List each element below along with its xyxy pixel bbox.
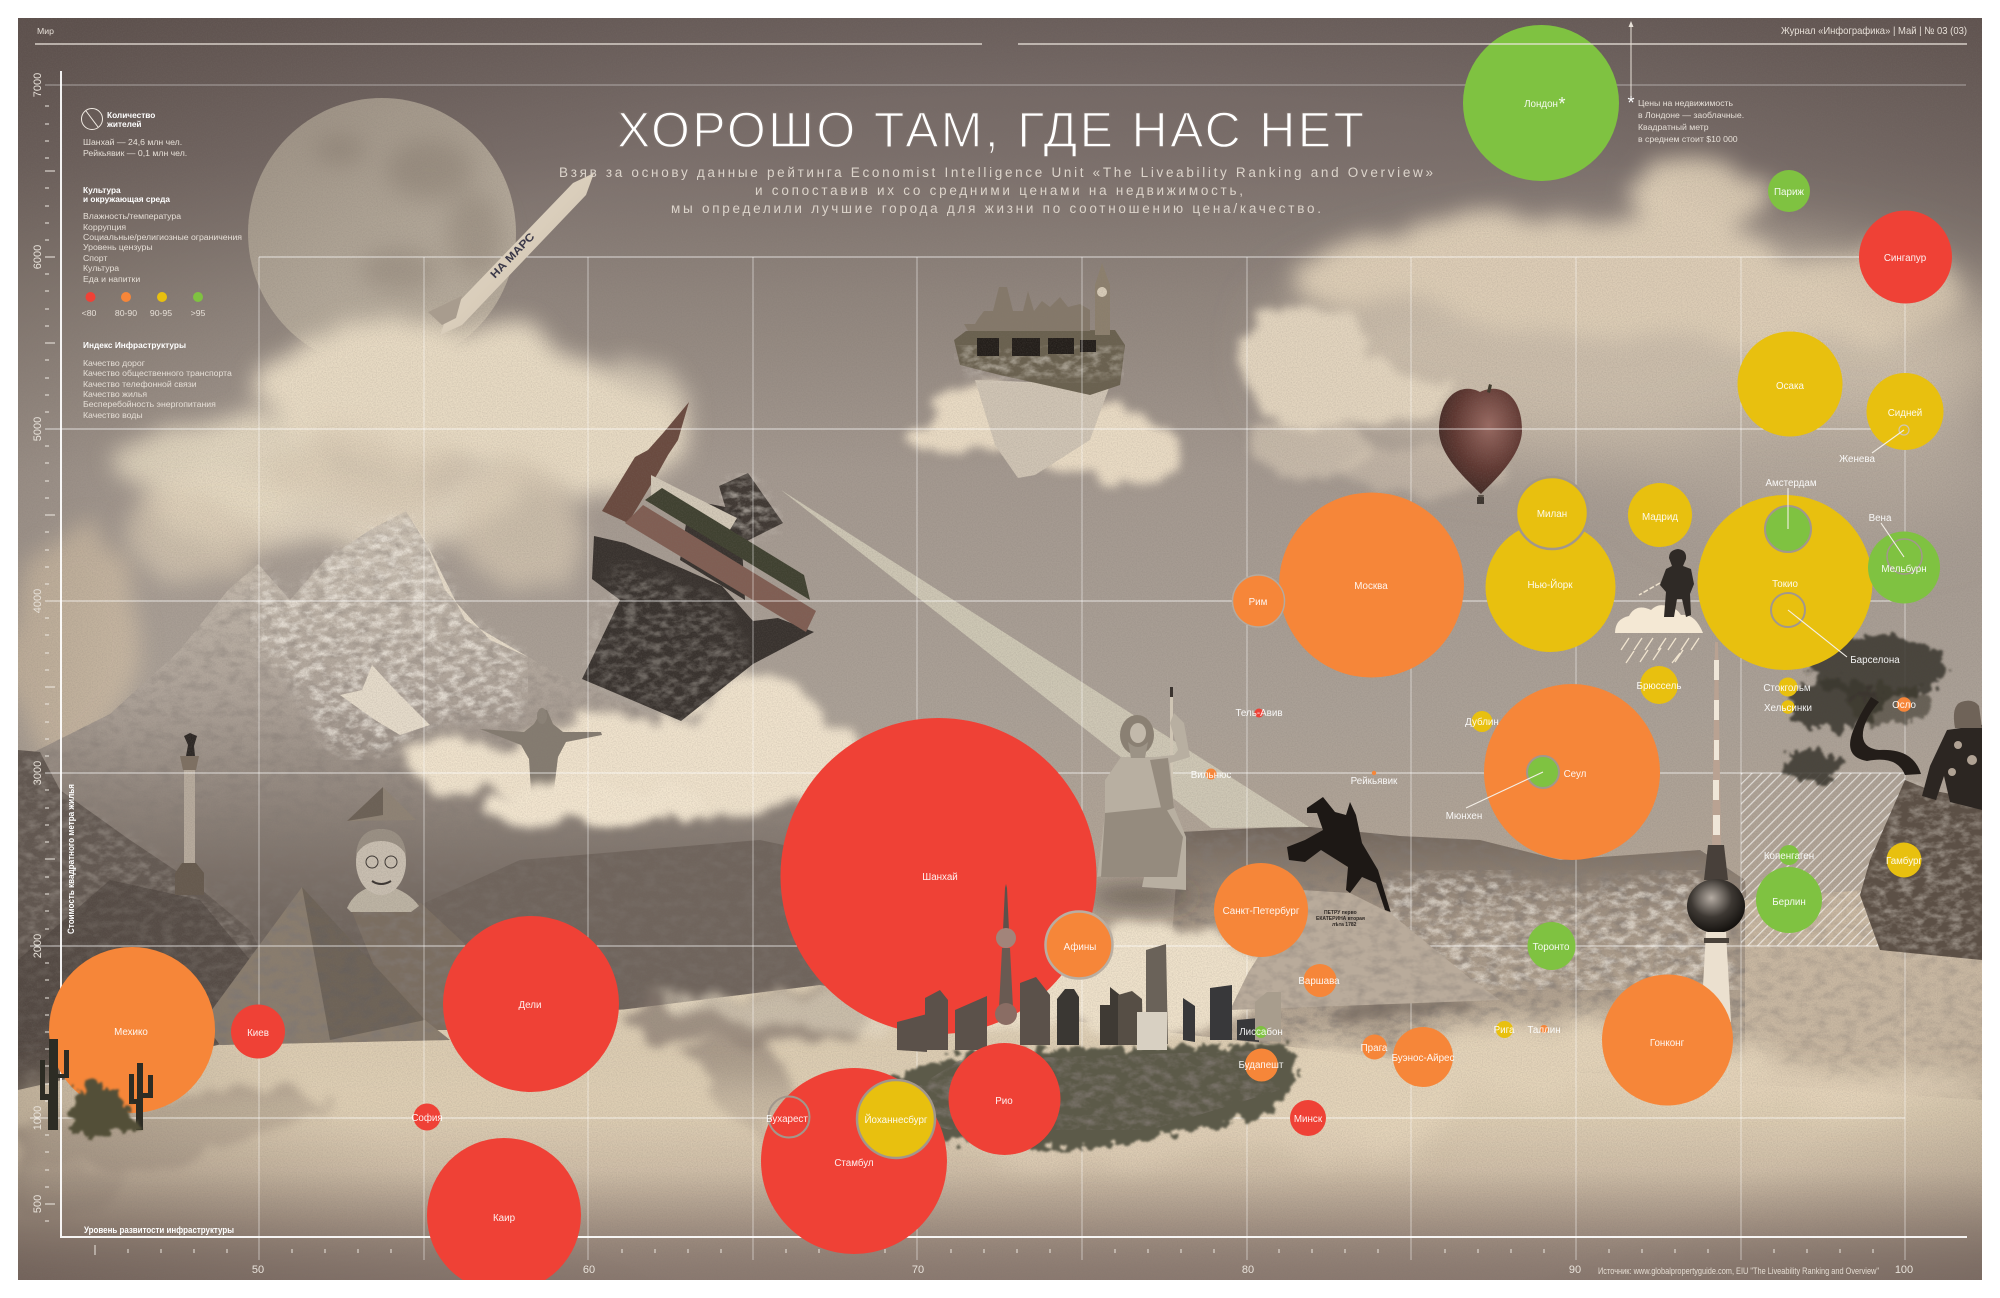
bubble labels: all cities: Вильнюс bbox=[1191, 770, 1231, 781]
bubble labels: all cities: Рио bbox=[995, 1096, 1013, 1107]
illustration: canyon bbox=[1172, 826, 1746, 1054]
bubble labels: all cities: Стамбул bbox=[834, 1158, 874, 1169]
bubble labels: all cities: Варшава bbox=[1298, 976, 1340, 987]
bubble labels: all cities: Рим bbox=[1249, 597, 1268, 608]
legend: culture and environment: Еда и напитки bbox=[83, 274, 140, 284]
bubble labels: all cities: Осло bbox=[1892, 700, 1916, 711]
legend: population: Шанхай — 24,6 млн чел. bbox=[83, 137, 182, 147]
bubble labels: all cities: Дублин bbox=[1465, 717, 1499, 728]
illustration: mermaid statue on rock bbox=[1860, 701, 1982, 960]
y axis labels: 500 bbox=[32, 1195, 44, 1213]
y axis labels: 5000 bbox=[32, 417, 44, 441]
legend: culture and environment: Культура bbox=[83, 263, 119, 273]
subtitle bbox=[559, 165, 1433, 216]
bubble labels: all cities: Таллин bbox=[1527, 1025, 1561, 1036]
header labels and rules: Журнал «Инфографика» | Май | № 03 (03) bbox=[1781, 25, 1967, 37]
legend: colour key bbox=[82, 292, 206, 318]
illustration: great pyramids bbox=[203, 887, 520, 1045]
bubble labels: all cities: * bbox=[1558, 94, 1566, 114]
bubble outlines: nested cities (Бухарест, Вена, Барселона, Женева) bbox=[768, 425, 1922, 1138]
title: ХОРОШО ТАМ, ГДЕ НАС НЕТ bbox=[617, 102, 1364, 158]
bubble labels: all cities: Гамбург bbox=[1886, 856, 1922, 867]
bubble labels: all cities: Рейкьявик bbox=[1351, 776, 1398, 787]
bubble labels: all cities: Лиссабон bbox=[1239, 1027, 1283, 1038]
bubble labels: all cities: Сингапур bbox=[1884, 253, 1927, 264]
bubble labels: all cities: Тель-Авив bbox=[1235, 708, 1283, 719]
London footnote with arrow: в среднем стоит $10 000 bbox=[1638, 134, 1738, 144]
bubble labels: all cities: Сеул bbox=[1564, 769, 1587, 780]
illustration: bonsai tree bbox=[1784, 636, 1946, 781]
text: rock inscription: ПЕТРУ перво bbox=[1324, 910, 1357, 916]
illustration: floating pyramid capstone bbox=[347, 787, 416, 821]
source note: Источник: www.globalpropertyguide.com, EIU "The Liveability Ranking and Overview" bbox=[1598, 1266, 1879, 1276]
bubble labels: all cities: Каир bbox=[493, 1213, 516, 1224]
illustration: Manneken Pis on cloud with rain bbox=[1615, 549, 1703, 663]
legend: culture and environment: Социальные/религиозные ограничения bbox=[83, 232, 242, 242]
x axis labels: 70 bbox=[912, 1264, 924, 1276]
legend: infrastructure index bbox=[83, 340, 232, 420]
text: rock inscription bbox=[1316, 910, 1365, 928]
cloud in front of Christ statue bbox=[480, 783, 700, 827]
legend: colour key: 90-95 bbox=[150, 308, 172, 318]
x axis title: Уровень развитости инфраструктуры bbox=[84, 1225, 234, 1235]
bubble labels: all cities: Буэнос-Айрес bbox=[1392, 1053, 1455, 1064]
y axis labels: 6000 bbox=[32, 245, 44, 269]
y axis labels: 1000 bbox=[32, 1106, 44, 1130]
callout leader lines bbox=[1466, 430, 1904, 808]
legend: population: жителей bbox=[106, 119, 142, 129]
x axis labels bbox=[252, 1264, 1913, 1276]
bubble labels: all cities: Стокгольм bbox=[1763, 683, 1811, 694]
illustration: water and dark sand streaks bbox=[18, 985, 1470, 1220]
illustration: Christ the Redeemer bbox=[480, 708, 602, 807]
bubble labels: all cities: Амстердам bbox=[1765, 478, 1817, 489]
illustration: dark central ridge bbox=[420, 840, 1040, 1010]
bubble labels: all cities: Мельбурн bbox=[1881, 564, 1927, 575]
illustration: cactus group bbox=[40, 1039, 153, 1138]
y axis labels: 3000 bbox=[32, 761, 44, 785]
subtitle: Взяв за основу данные рейтинга Economist Intelligence Unit «The Liveability Ranking and Overview» bbox=[559, 165, 1433, 180]
bubble labels: all cities: Москва bbox=[1354, 581, 1388, 592]
London footnote with arrow: Цены на недвижимость bbox=[1638, 98, 1734, 108]
subtitle: мы определили лучшие города для жизни по соотношению цена/качество. bbox=[671, 201, 1321, 216]
text: rock inscription: лѣта 1782 bbox=[1332, 922, 1357, 928]
illustration: Bronze Horseman on rock bbox=[1230, 797, 1500, 1010]
x axis labels: 80 bbox=[1242, 1264, 1254, 1276]
bubble labels: all cities: Шанхай bbox=[922, 872, 958, 883]
text: rock inscription: ЕКАТЕРИНА вторая bbox=[1316, 916, 1365, 922]
illustration: cloud around Christ statue bbox=[411, 675, 858, 822]
legend: population bbox=[82, 108, 187, 158]
London footnote with arrow bbox=[1627, 21, 1744, 144]
illustration: moon bbox=[248, 98, 516, 368]
soft lightening of right sky bbox=[1280, 240, 2000, 530]
cloud: large plume under the rocket bbox=[10, 310, 690, 755]
bubble labels: all cities: Брюссель bbox=[1637, 681, 1681, 692]
legend: infrastructure index: Качество воды bbox=[83, 410, 143, 420]
legend: infrastructure index: Бесперебойность энергопитания bbox=[83, 399, 216, 409]
bubble labels: all cities: Минск bbox=[1294, 1114, 1323, 1125]
illustration: left dark mountain bbox=[18, 750, 270, 1090]
illustration: ground and sand beach bbox=[18, 985, 1982, 1280]
hatched best-value area bbox=[1741, 773, 1905, 946]
London footnote with arrow: в Лондоне — заоблачные. bbox=[1638, 110, 1744, 120]
illustration: rocky cliff right bbox=[1745, 880, 1982, 1150]
cloud: upper right bbox=[1300, 158, 1970, 345]
bubbles: yellow cities bbox=[857, 332, 1944, 1158]
bubble labels: all cities: Прага bbox=[1361, 1043, 1388, 1054]
legend: infrastructure index: Индекс Инфраструктуры bbox=[83, 340, 186, 350]
bubble labels: all cities: Барселона bbox=[1850, 655, 1900, 666]
legend: culture and environment: Культура bbox=[83, 185, 121, 195]
x axis labels: 50 bbox=[252, 1264, 264, 1276]
illustration: Berlin TV tower bbox=[1687, 642, 1745, 1022]
header labels and rules bbox=[35, 25, 1967, 44]
fog on the mountain summit bbox=[115, 436, 580, 585]
illustration: Gandhi portrait bbox=[347, 829, 419, 912]
bubble labels: all cities: Йоханнесбург bbox=[864, 1114, 928, 1126]
bubble labels: all cities: Будапешт bbox=[1238, 1060, 1284, 1071]
legend: culture and environment: Влажность/температура bbox=[83, 211, 181, 221]
bubble labels: all cities: Вена bbox=[1869, 513, 1892, 524]
bubble labels: all cities: Берлин bbox=[1772, 897, 1806, 908]
legend: colour key: <80 bbox=[82, 308, 97, 318]
bubble labels: all cities: Нью-Йорк bbox=[1527, 579, 1573, 591]
illustration: trees under skyline bbox=[855, 1044, 1300, 1150]
illustration: rocket to Mars bbox=[428, 173, 594, 335]
legend: infrastructure index: Качество общественного транспорта bbox=[83, 368, 232, 378]
bubble labels: all cities: Хельсинки bbox=[1764, 703, 1812, 714]
bubble labels: all cities: Бухарест bbox=[766, 1114, 808, 1125]
legend: infrastructure index: Качество дорог bbox=[83, 358, 145, 368]
legend: colour key: 80-90 bbox=[115, 308, 137, 318]
cream haze behind skyline bbox=[970, 930, 1280, 1030]
legend: culture and environment: Коррупция bbox=[83, 222, 126, 232]
cloud: under floating island bbox=[910, 388, 1182, 481]
bubble labels: all cities: Осака bbox=[1776, 381, 1805, 392]
cloud: centre right behind apple balloon bbox=[1243, 300, 1505, 492]
bubble labels: all cities: Женева bbox=[1839, 454, 1875, 465]
y axis title: Стоимость квадратного метра жилья bbox=[66, 784, 76, 934]
bubble labels: all cities: Париж bbox=[1774, 187, 1804, 198]
bubbles: red cities bbox=[231, 210, 1952, 1292]
bubble labels: all cities bbox=[114, 94, 1927, 1224]
bubble labels: all cities: Токио bbox=[1772, 579, 1798, 590]
legend: population: Рейкьявик — 0,1 млн чел. bbox=[83, 148, 187, 158]
bubble labels: all cities: Рига bbox=[1494, 1025, 1515, 1036]
x axis labels: 90 bbox=[1569, 1264, 1581, 1276]
bubble labels: all cities: Санкт-Петербург bbox=[1223, 906, 1300, 917]
header labels and rules: Мир bbox=[37, 26, 54, 36]
bubble labels: all cities: Киев bbox=[247, 1028, 269, 1039]
bubble labels: all cities: Афины bbox=[1064, 942, 1096, 953]
y axis labels bbox=[32, 73, 44, 1213]
legend: culture and environment: Уровень цензуры bbox=[83, 242, 153, 252]
illustration: King Kong with Kremlin bbox=[582, 402, 816, 721]
illustration: Shanghai skyline bbox=[897, 884, 1281, 1052]
bubble labels: all cities: Лондон bbox=[1524, 99, 1558, 110]
background sky bbox=[18, 18, 1982, 1023]
y axis labels: 4000 bbox=[32, 589, 44, 613]
x axis labels: 60 bbox=[583, 1264, 595, 1276]
illustration: light beam bbox=[781, 490, 1309, 828]
subtitle: и сопоставив их со средними ценами на недвижимость, bbox=[755, 183, 1243, 198]
bubbles: green cities bbox=[1255, 25, 1940, 1038]
bubble labels: all cities: Копенгаген bbox=[1764, 851, 1814, 862]
illustration: floating Westminster island bbox=[954, 263, 1125, 478]
bubble labels: all cities: София bbox=[411, 1113, 443, 1124]
bubble labels: all cities: Гонконг bbox=[1650, 1038, 1685, 1049]
illustration: Zeus statue bbox=[1085, 687, 1195, 906]
legend: culture and environment bbox=[83, 185, 242, 284]
x axis labels: 100 bbox=[1895, 1264, 1913, 1276]
bubble labels: all cities: Мадрид bbox=[1642, 512, 1678, 523]
legend: culture and environment: и окружающая среда bbox=[83, 194, 170, 204]
y axis labels: 2000 bbox=[32, 934, 44, 958]
bubble labels: all cities: Сидней bbox=[1888, 408, 1922, 419]
bubbles: orange cities bbox=[49, 492, 1911, 1113]
London footnote with arrow: * bbox=[1627, 93, 1635, 113]
London footnote with arrow: Квадратный метр bbox=[1638, 122, 1709, 132]
bubble labels: all cities: Мюнхен bbox=[1446, 811, 1482, 822]
bubble labels: all cities: Дели bbox=[519, 1000, 541, 1011]
legend: population: Количество bbox=[107, 110, 155, 120]
bubble labels: all cities: Мехико bbox=[114, 1027, 148, 1038]
y axis labels: 7000 bbox=[32, 73, 44, 97]
clouds around the lower fog bbox=[940, 1022, 1990, 1160]
legend: culture and environment: Спорт bbox=[83, 253, 107, 263]
fog bottom darkening bbox=[18, 1170, 1982, 1280]
bubble labels: all cities: Милан bbox=[1537, 509, 1567, 520]
legend: colour key: >95 bbox=[191, 308, 206, 318]
legend: infrastructure index: Качество жилья bbox=[83, 389, 147, 399]
illustration: independence column monument bbox=[175, 733, 204, 895]
illustration: snowy mountain bbox=[36, 512, 801, 964]
bubble: Шанхай bbox=[780, 718, 1096, 1034]
legend: infrastructure index: Качество телефонной связи bbox=[83, 379, 197, 389]
illustration: rocket to Mars: НА МАРС bbox=[488, 231, 537, 281]
illustration: apple hot-air balloon bbox=[1439, 384, 1522, 504]
fog over lower land bbox=[18, 1060, 1982, 1290]
bubble labels: all cities: Торонто bbox=[1533, 942, 1570, 953]
